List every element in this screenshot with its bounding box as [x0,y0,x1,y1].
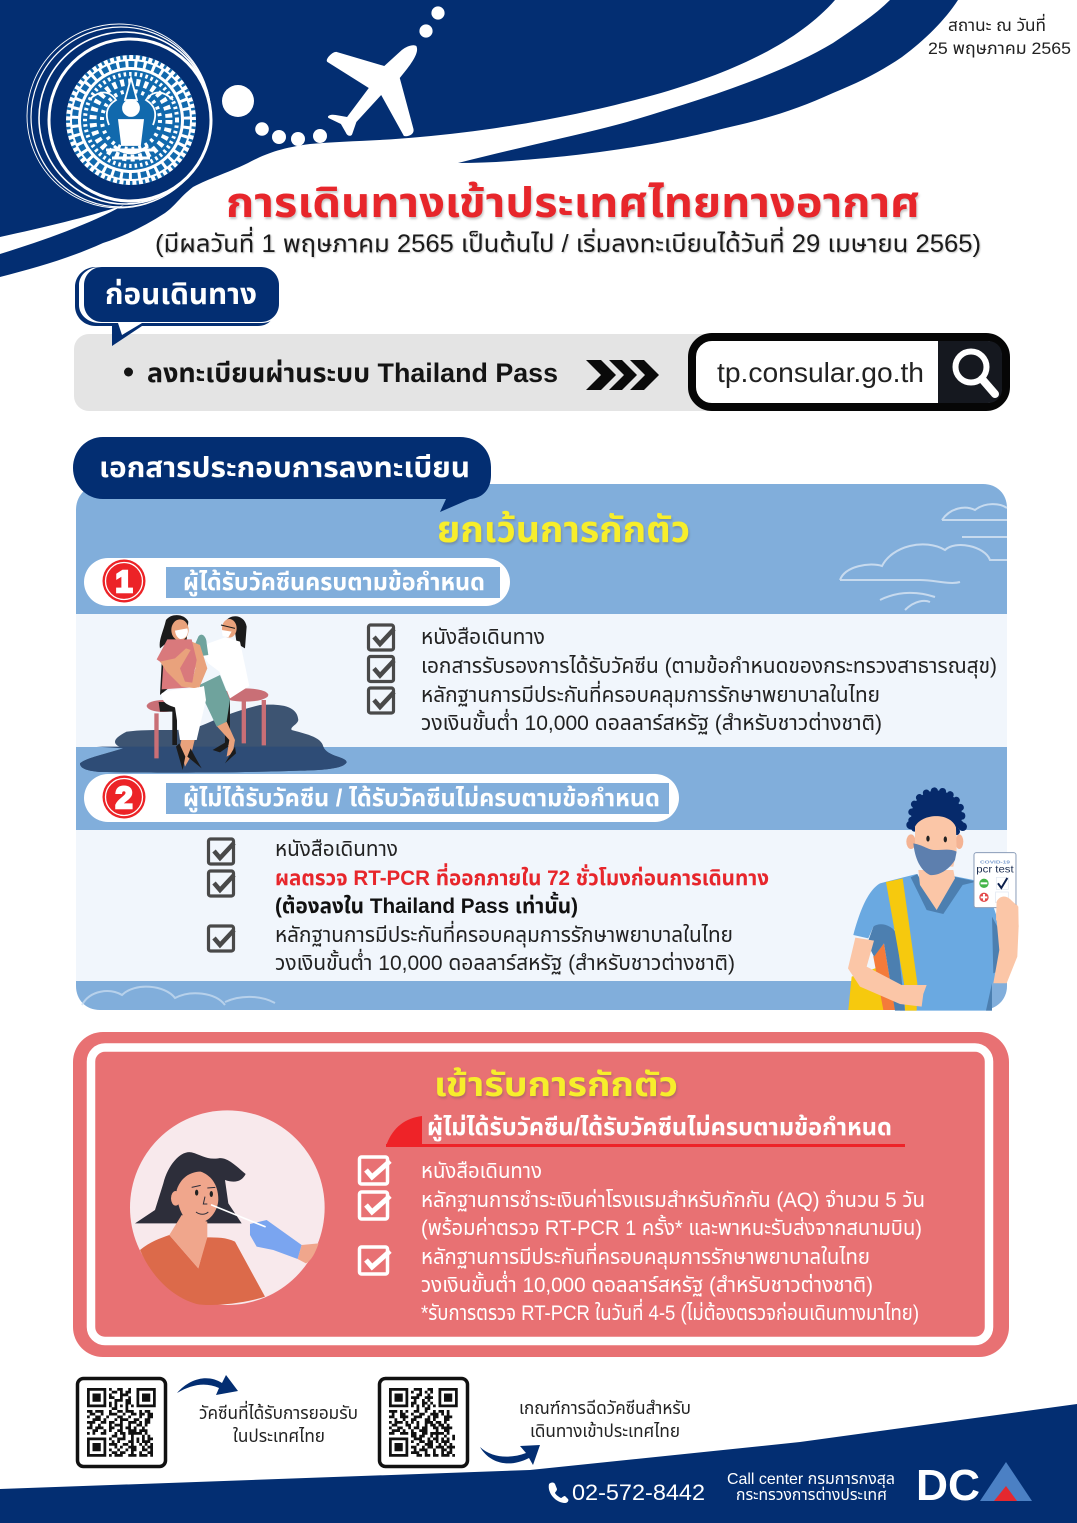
checklist: quarantine [421,1160,925,1325]
caption: vaccination criteria [519,1398,691,1441]
logo: DCA: DC [916,1461,980,1510]
forearm [298,1243,319,1263]
icon: checkboxes group 1 [368,625,394,713]
illustration: vaccination scene [80,615,347,773]
checklist: group 2: ผลตรวจ RT-PCR ที่ออกภายใน 72 ชั่วโมงก่อนการเดินทาง [275,863,769,890]
glove [250,1220,302,1259]
checklist: group 2: หนังสือเดินทาง [275,838,398,861]
illustration: man with PCR test card [848,791,1019,1011]
patient top [157,639,197,689]
registration text: ลงทะเบียนผ่านระบบ Thailand Pass [147,358,558,388]
checklist: group 2: หลักฐานการมีประกันที่ครอบคลุมการรักษาพยาบาลในไทย [275,920,733,948]
illustration: nasal swab in circle [130,1110,325,1305]
left arm [848,938,927,1007]
panel: exempt from quarantine [76,484,1007,1010]
call center label [727,1471,895,1504]
clouds: top right [840,504,1007,610]
icon: checkboxes quarantine [360,1157,390,1274]
search box: website address: tp.consular.go.th [717,357,924,388]
call center label: กระทรวงการต่างประเทศ [736,1486,887,1504]
heading: exempt: ยกเว้นการกักตัว [437,509,690,550]
pill: group 1 vaccinated: ผู้ได้รับวัคซีนครบตามข้อกำหนด [183,568,485,597]
doctor hair [226,616,247,648]
checklist: group 1: วงเงินขั้นต่ำ 10,000 ดอลลาร์สหรัฐ (สำหรับชาวต่างชาติ) [421,708,882,735]
doctor coat [202,637,249,698]
checklist: group 2 [275,838,769,975]
subtitle: (มีผลวันที่ 1 พฤษภาคม 2565 เป็นต้นไป / เริ่มลงทะเบียนได้วันที่ 29 เมษายน 2565) [155,226,981,258]
status date text: สถานะ ณ วันที่ [948,13,1046,35]
checklist: group 2: วงเงินขั้นต่ำ 10,000 ดอลลาร์สหรัฐ (สำหรับชาวต่างชาติ) [275,948,735,975]
icon: checkboxes group 2 [208,839,234,951]
arrow: to accepted vaccines text [177,1375,238,1395]
caption: accepted vaccines [199,1400,358,1446]
caption: vaccination criteria: เดินทางเข้าประเทศไทย [530,1421,680,1441]
test card: pcr test [976,864,1014,875]
footer navy band [0,1404,1077,1523]
patient face and mask [171,619,189,641]
right arm [993,898,1019,983]
sub heading with red tab: ผู้ไม่ได้รับวัคซีน/ได้รับวัคซีนไม่ครบตามข้อกำหนด [427,1113,892,1142]
status date text: 25 พฤษภาคม 2565 [928,39,1071,58]
heading bubble: registration documents: เอกสารประกอบการลงทะเบียน [99,452,470,483]
left stool [147,700,180,758]
checklist: quarantine: วงเงินขั้นต่ำ 10,000 ดอลลาร์สหรัฐ (สำหรับชาวต่างชาติ) [421,1270,873,1297]
checklist: quarantine: (พร้อมค่าตรวจ RT-PCR 1 ครั้ง* และพาหนะรับส่งจากสนามบิน) [421,1214,922,1240]
patient forearm [160,648,197,688]
QR code: vaccination criteria [380,1378,468,1466]
icon: ministry seal with swirl rings [27,24,211,208]
arrows: triple chevron [586,360,659,390]
pill: group 2 unvaccinated: 2 [115,780,133,815]
caption: vaccination criteria: เกณฑ์การฉีดวัคซีนสำหรับ [519,1398,691,1418]
doctor face [221,619,237,638]
hair back [135,1152,246,1223]
icon: phone [549,1482,568,1503]
checklist: group 1: เอกสารรับรองการได้รับวัคซีน (ตามข้อกำหนดของกระทรวงสาธารณสุข) [421,654,997,679]
panel: quarantine required [73,1032,1009,1357]
patient pants [162,686,206,740]
checklist: group 1: หลักฐานการมีประกันที่ครอบคลุมการรักษาพยาบาลในไทย [421,680,880,708]
patient legs and shoes [176,738,202,770]
pill: group 2 unvaccinated [84,774,679,822]
face [171,1172,218,1224]
checklist: quarantine: หลักฐานการมีประกันที่ครอบคลุมการรักษาพยาบาลในไทย [421,1242,870,1270]
pill: group 2 unvaccinated: ผู้ไม่ได้รับวัคซีน / ได้รับวัคซีนไม่ครบตามข้อกำหนด [183,784,660,813]
phone number: 02-572-8442 [572,1480,705,1505]
right stool [222,688,268,745]
shirt [853,874,1003,1011]
doctor legs and pants [199,675,236,763]
status date text [928,13,1071,58]
QR code: accepted vaccines [78,1378,166,1466]
checklist: quarantine: หลักฐานการชำระเงินค่าโรงแรมสำหรับกักกัน (AQ) จำนวน 5 วัน [421,1188,925,1212]
test card [974,853,1016,908]
sweater [140,1235,265,1305]
checklist: quarantine: *รับการตรวจ RT-PCR ในวันที่ 4-5 (ไม่ต้องตรวจก่อนเดินทางมาไทย) [421,1298,919,1325]
heading bubble: before travel: ก่อนเดินทาง [105,279,257,311]
clouds: bottom left [82,987,275,1005]
icon: airplane with dotted trail [222,6,445,146]
test card: COVID-19 [980,859,1010,865]
checklist: quarantine: หนังสือเดินทาง [421,1160,542,1183]
pill: group 1 vaccinated: 1 [115,564,133,599]
swab [212,1205,265,1227]
grey registration bar [74,334,754,411]
strap [886,878,917,1011]
head [906,791,967,910]
heading bubble: before travel [75,267,279,346]
call center label: Call center กรมการกงสุล [727,1471,895,1488]
checklist: group 2: (ต้องลงใน Thailand Pass เท่านั้น) [275,892,578,918]
caption: accepted vaccines: ในประเทศไทย [233,1426,325,1446]
search box: website address [692,337,1006,407]
logo: DCA [916,1461,1032,1510]
title: การเดินทางเข้าประเทศไทยทางอากาศ [226,179,920,226]
hand holding card [996,897,1019,930]
arrow: from criteria QR [480,1445,540,1465]
header navy swoosh [0,0,958,277]
band: unvaccinated details [76,830,1007,981]
checklist: group 1 [421,626,997,735]
bag [848,967,893,1010]
band: vaccinated details [76,614,1007,747]
doctor glove [194,635,208,656]
patient hair [160,615,188,695]
pill: group 1 vaccinated [84,558,510,606]
caption: accepted vaccines: วัคซีนที่ได้รับการยอมรับ [199,1400,358,1423]
patient arm [191,642,207,687]
checklist: group 1: หนังสือเดินทาง [421,626,545,649]
heading: quarantine: เข้ารับการกักตัว [434,1066,678,1104]
neck [169,1215,207,1268]
heading bubble: registration documents [73,437,491,512]
